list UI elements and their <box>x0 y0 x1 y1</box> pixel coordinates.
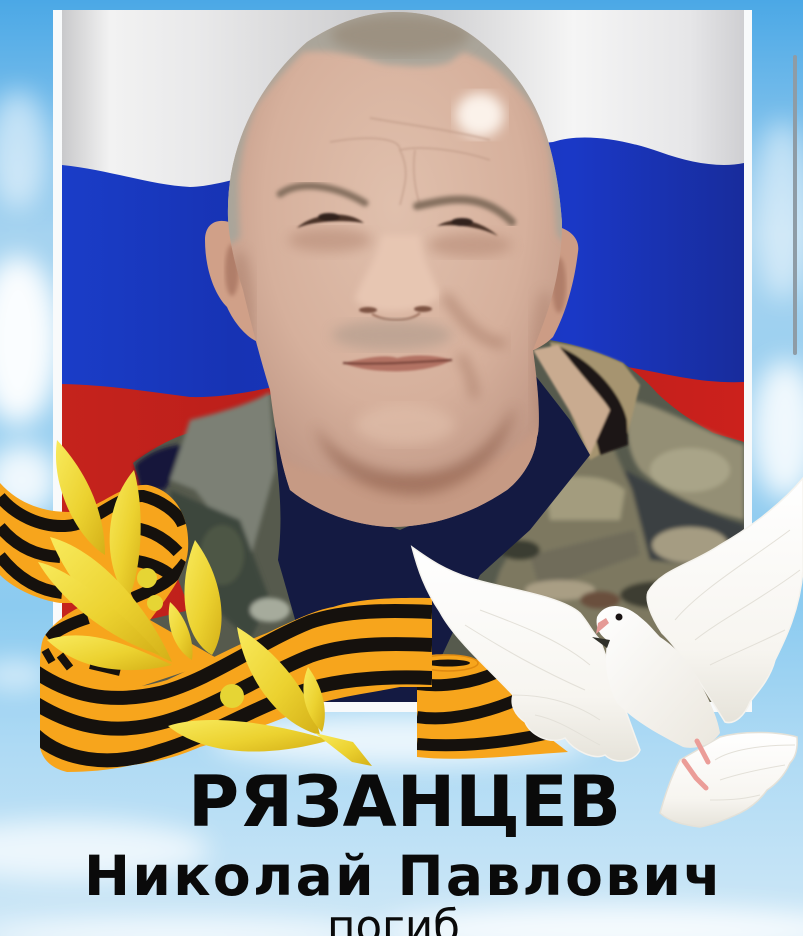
side face shadows <box>234 252 256 336</box>
dove beak <box>596 618 609 634</box>
dove body <box>597 606 720 748</box>
first name and patronymic: Николай Павлович <box>84 844 721 908</box>
nose <box>355 235 440 311</box>
camouflage patches <box>135 392 744 702</box>
head and neck with shading <box>220 0 575 535</box>
right end of St George ribbon <box>417 654 568 759</box>
dove feet <box>684 741 708 788</box>
dark gap under beak <box>592 637 610 648</box>
ears <box>205 221 578 352</box>
laurel berries <box>137 568 244 708</box>
white dove <box>412 478 803 827</box>
forehead wrinkles <box>330 118 490 205</box>
feather lines <box>465 530 800 800</box>
laurel branch <box>38 440 372 766</box>
laurel leaves <box>56 440 105 555</box>
eyebrows <box>280 186 512 222</box>
hair <box>228 12 562 246</box>
nasolabial folds <box>445 295 505 398</box>
chin highlight <box>360 409 452 444</box>
portrait <box>132 12 744 702</box>
dark navy shirt <box>275 375 590 702</box>
dove left wing <box>412 547 640 761</box>
Russian flag <box>62 10 744 620</box>
nostrils <box>359 306 432 320</box>
dove eye <box>616 614 622 620</box>
jacket collar <box>533 342 640 460</box>
dove tail <box>660 732 797 827</box>
moustache stubble <box>332 320 452 350</box>
back loop of St George ribbon <box>0 483 214 688</box>
photo panel: white frame <box>53 10 752 712</box>
eye sockets <box>288 228 512 257</box>
front band of St George ribbon <box>40 598 432 772</box>
screen scrollbar <box>793 55 797 355</box>
jacket <box>133 340 744 702</box>
neck shading <box>280 423 539 527</box>
forehead highlight <box>456 93 504 137</box>
mouth <box>343 356 452 371</box>
surname: РЯЗАНЦЕВ <box>188 761 621 843</box>
dove right wing <box>647 478 803 723</box>
eyes <box>297 213 498 236</box>
